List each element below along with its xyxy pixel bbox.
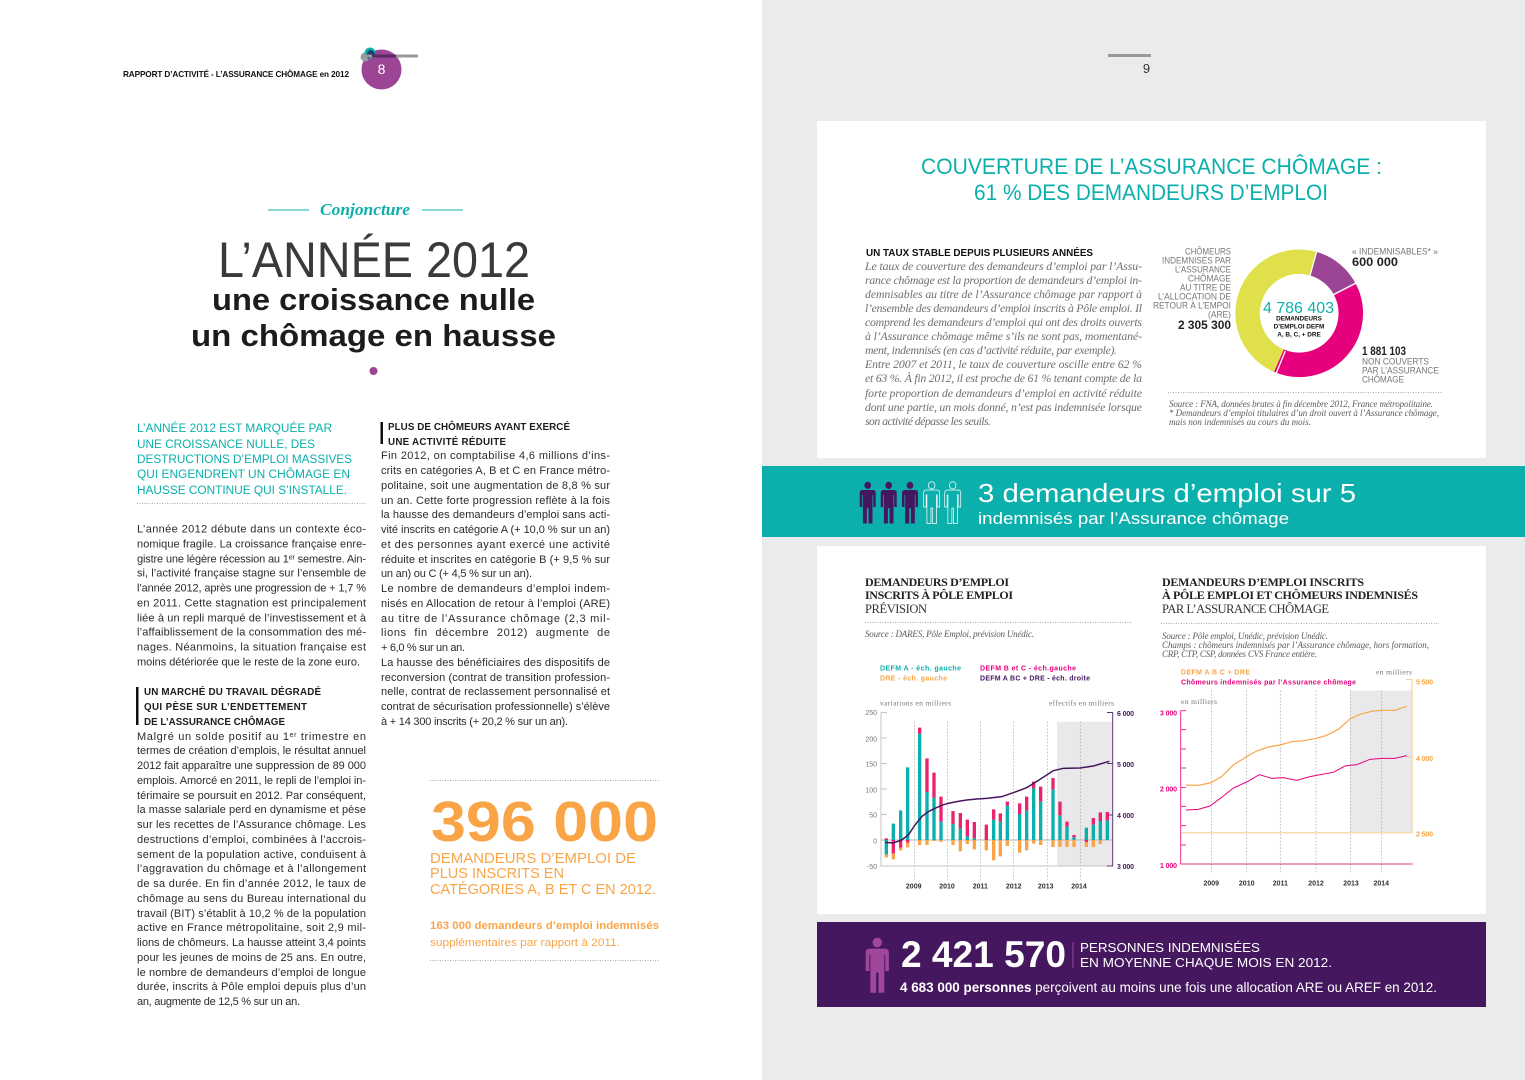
year labels: 2009 <box>1204 880 1219 888</box>
left column paragraph 2: durée, inscrits à Pôle emploi depuis plus d’un <box>137 981 366 993</box>
left axis labels: 100 <box>865 788 877 794</box>
main title: une croissance nulle <box>212 282 535 317</box>
left column paragraph 2: de sa durée. En fin d’année 2012, le taux de <box>137 878 366 890</box>
source note: * Demandeurs d’emploi titulaires d’un droit ouvert à l’Assurance chômage, <box>1169 408 1439 418</box>
callout: 396 000: PLUS INSCRITS EN <box>430 865 564 882</box>
left column paragraph 2: trimestre en <box>297 731 366 743</box>
left column paragraph 1: liée à un repli marqué de l’investissement et à <box>137 612 367 624</box>
heading: right chart: DEMANDEURS D’EMPLOI INSCRITS <box>1162 575 1364 589</box>
donut label: indemnified: L’ALLOCATION DE <box>1158 292 1231 302</box>
year labels <box>906 884 1087 890</box>
donut label: indemnified: CHÔMEURS <box>1185 246 1231 256</box>
left column paragraph 2: travail (BIT) s’établit à 10,2 % de la population <box>137 908 366 920</box>
left column paragraph 1: moins détériorée que le reste de la zone euro. <box>137 656 360 668</box>
callout: 396 000: supplémentaires par rapport à 2011. <box>430 937 620 949</box>
donut label: indemnisables: « INDEMNISABLES* » <box>1352 246 1438 256</box>
heading: left chart: INSCRITS À PÔLE EMPLOI <box>865 588 1013 602</box>
donut center label <box>1263 300 1334 338</box>
intro text: UNE CROISSANCE NULLE, DES <box>137 437 315 451</box>
left column subheading <box>136 686 321 728</box>
text block: stable rate <box>864 247 1143 428</box>
year labels <box>1204 880 1389 888</box>
purple dot ornament <box>370 367 378 375</box>
left column paragraph 2: destructions d’emploi, combinées à l’accrois- <box>137 834 366 846</box>
heading: coverage: 61 % DES DEMANDEURS D’EMPLOI <box>974 180 1328 205</box>
page number 8 badge: 8 <box>378 61 386 77</box>
right scale labels: 2 500 <box>1416 832 1433 838</box>
right scale labels: 5 500 <box>1416 680 1433 686</box>
year labels: 2013 <box>1038 884 1054 890</box>
banner: 2 421 570 <box>817 922 1486 1007</box>
text block: stable rate: ment, indemnisés (en cas d’activité réduite, par exemple). <box>865 343 1117 357</box>
year labels: 2011 <box>973 884 988 890</box>
left column paragraph 1: er <box>289 554 296 562</box>
left column paragraph 2: sement de la population active, conduisent à <box>137 849 367 861</box>
page number 8 badge <box>360 48 418 90</box>
second column body text: un an) ou C (+ 4,5 % sur un an). <box>381 568 532 580</box>
second column body text <box>381 450 610 728</box>
left scale labels <box>1160 710 1177 870</box>
text block: stable rate: Le taux de couverture des demandeurs d’emploi par l’Assu- <box>864 259 1142 273</box>
donut center label: D’EMPLOI DEFM <box>1274 324 1324 330</box>
second column body text: à + 14 300 inscrits (+ 20,2 % sur un an). <box>381 716 568 728</box>
text block: stable rate: à l’Assurance chômage même s’ils ne sont pas, momentané- <box>865 329 1142 343</box>
left scale labels: 3 000 <box>1160 710 1177 718</box>
right chart: two line series: en milliers <box>1181 697 1217 706</box>
text block: stable rate: son activité dépasse les seuils. <box>865 414 991 428</box>
second column body text: un an. Cette forte progression reflète à la fois <box>381 495 610 507</box>
second column body text: reconversion (contrat de transition profession- <box>381 672 610 684</box>
donut label: indemnified: INDEMNISÉS PAR <box>1162 256 1231 266</box>
banner text: 3 demandeurs d’emploi sur 5 <box>978 478 1356 508</box>
left column paragraph 1: gistre une légère récession au 1 <box>137 554 289 566</box>
left column paragraph 1: l’affaiblissement de la consommation des mé- <box>137 626 366 638</box>
year labels: 2014 <box>1071 884 1087 890</box>
left column paragraph 1: si, l’activité française stagne sur l’ensemble de <box>137 568 366 580</box>
source note: mais non indemnisés au cours du mois. <box>1169 417 1311 427</box>
left column paragraph 2: térimaire se poursuit en 2012. Par conséquent, <box>137 790 366 802</box>
left column paragraph 2 <box>137 731 367 1008</box>
left chart: variations bar chart with line <box>865 698 1134 890</box>
left axis labels: 250 <box>865 710 877 717</box>
left axis labels: -50 <box>867 864 877 871</box>
section label: Conjoncture: Conjoncture <box>320 200 410 219</box>
text block: stable rate: Entre 2007 et 2011, le taux de couverture oscille entre 62 % <box>864 357 1142 371</box>
donut label: not covered: 1 881 103 <box>1362 346 1406 358</box>
donut center label: DEMANDEURS <box>1276 316 1323 322</box>
page number 9: 9 <box>1143 61 1150 76</box>
donut label: indemnisables: 600 000 <box>1352 255 1398 269</box>
intro text: L’ANNÉE 2012 EST MARQUÉE PAR <box>137 420 332 435</box>
left column subheading: UN MARCHÉ DU TRAVAIL DÉGRADÉ <box>144 686 321 698</box>
left column paragraph 2: 2012 fait apparaître une suppression de 89 000 <box>137 760 366 772</box>
left column paragraph 1: semestre. Ain- <box>295 554 366 566</box>
callout: 396 000: 163 000 demandeurs d’emploi indemnisés <box>430 920 659 932</box>
icon: person <box>866 938 889 993</box>
figure caption: EN MOYENNE CHAQUE MOIS EN 2012. <box>1080 955 1332 970</box>
heading: right chart: PAR L’ASSURANCE CHÔMAGE <box>1162 602 1329 616</box>
donut center label: A, B, C, + DRE <box>1277 332 1321 338</box>
year labels: 2012 <box>1006 884 1022 890</box>
left column paragraph 2: active en France métropolitaine, soit 2,9 mil- <box>137 922 366 934</box>
right chart: two line series <box>1160 668 1433 888</box>
donut label: not covered: CHÔMAGE <box>1362 374 1404 384</box>
donut chart <box>1248 251 1356 375</box>
left chart legend: DEFM A BC + DRE - éch. droite <box>980 676 1090 682</box>
heading: right chart: À PÔLE EMPLOI ET CHÔMEURS INDEMNISÉS <box>1162 588 1418 602</box>
text block: stable rate: rance chômage est la proportion de demandeurs d’emploi in- <box>865 273 1142 287</box>
source note: Source : FNA, données brutes à fin décembre 2012, France métropolitaine. <box>1169 399 1433 409</box>
second column body text: crits en catégories A, B et C en France métro- <box>381 465 610 477</box>
text block: stable rate: comprend les demandeurs d’emploi qui ont des droits ouverts <box>865 315 1142 329</box>
donut label: indemnified: L’ASSURANCE <box>1175 264 1231 274</box>
left column paragraph 1: L’année 2012 débute dans un contexte éco- <box>137 524 366 536</box>
left column paragraph 2: le nombre de demandeurs d’emploi de longue <box>137 967 366 979</box>
left axis labels: 150 <box>865 762 877 768</box>
second column body text: contrat de sécurisation professionnelle) s’élève <box>381 701 610 713</box>
heading: left chart: Source : DARES, Pôle Emploi, prévision Unédic. <box>865 629 1034 639</box>
right page background <box>762 0 1525 1080</box>
left scale labels: 2 000 <box>1160 786 1177 794</box>
year labels: 2011 <box>1273 880 1288 888</box>
callout: 396 000: DEMANDEURS D’EMPLOI DE <box>430 850 636 867</box>
heading: right chart <box>1161 575 1439 659</box>
year labels: 2012 <box>1308 880 1324 888</box>
icon: five people <box>860 482 961 524</box>
banner text: indemnisés par l’Assurance chômage <box>978 510 1289 528</box>
donut label: indemnified: (ARE) <box>1208 310 1231 320</box>
donut label: not covered: PAR L’ASSURANCE <box>1362 366 1439 376</box>
second column body text: au titre de l’Assurance chômage (2,3 mil- <box>381 613 610 625</box>
left column paragraph 1: nages. Néanmoins, la situation française est <box>137 642 366 654</box>
left column paragraph 2: chômage au sens du Bureau international du <box>137 893 366 905</box>
heading: right chart: Champs : chômeurs indemnisés par l’Assurance chômage, hors formation, <box>1162 640 1429 650</box>
left column paragraph 2: an, augmente de 12,5 % sur un an. <box>137 996 300 1008</box>
main title: un chômage en hausse <box>191 318 556 353</box>
left axis labels: 0 <box>873 838 877 846</box>
second column body text: Le nombre de demandeurs d’emploi indem- <box>381 583 610 595</box>
left column subheading: DE L’ASSURANCE CHÔMAGE <box>144 716 285 728</box>
source note <box>1169 399 1439 427</box>
intro text <box>137 420 352 497</box>
second column body text: réduite et inscrites en catégorie B (+ 9,5 % sur <box>381 554 610 566</box>
second column body text: politaine, soit une augmentation de 8,8 % sur <box>381 480 610 492</box>
donut label: indemnified: CHÔMAGE <box>1188 274 1231 284</box>
main title <box>191 232 556 353</box>
heading: right chart: CRP, CTP, CSP, données CVS France entière. <box>1162 649 1317 659</box>
heading: left chart <box>865 575 1132 639</box>
left column paragraph 2: pour les jeunes de moins de 25 ans. En outre, <box>137 952 366 964</box>
right chart: two line series: DEFM A B C + DRE <box>1181 670 1250 676</box>
left column paragraph 2: er <box>290 732 297 739</box>
intro text: DESTRUCTIONS D’EMPLOI MASSIVES <box>137 452 352 466</box>
left chart legend: DEFM A - éch. gauche <box>880 666 961 672</box>
left axis labels: 50 <box>869 812 877 820</box>
right axis labels: 4 000 <box>1117 813 1134 820</box>
second column body text: Fin 2012, on comptabilise 4,6 millions d’ins- <box>381 450 610 462</box>
year labels: 2010 <box>1239 880 1255 888</box>
heading: right chart: Source : Pôle emploi, Unédic, prévision Unédic. <box>1162 631 1328 641</box>
second column subheading <box>380 421 570 448</box>
left scale labels: 1 000 <box>1160 863 1177 870</box>
left column paragraph 2: l’aggravation du chômage et à l’allongement <box>137 863 366 875</box>
left column paragraph 2: la masse salariale perd en dynamisme et pèse <box>137 804 366 816</box>
left column paragraph 2: emplois. Amorcé en 2011, le repli de l’emploi in- <box>137 775 366 787</box>
panel: charts <box>817 546 1486 914</box>
text block: stable rate: demnisables au titre de l’Assurance chômage par rapport à <box>865 287 1142 301</box>
panel: coverage <box>817 121 1486 458</box>
callout: 396 000: 396 000 <box>431 790 658 854</box>
second column body text: La hausse des bénéficiaires des dispositifs de <box>381 657 610 669</box>
left chart legend <box>880 666 1090 682</box>
left column paragraph 2: Malgré un solde positif au 1 <box>137 731 289 743</box>
year labels: 2009 <box>906 884 922 890</box>
banner: 3 out of 5 <box>762 466 1525 537</box>
left chart legend: DRE - éch. gauche <box>880 676 947 682</box>
donut label: indemnified: 2 305 300 <box>1178 318 1231 332</box>
text block: stable rate: l’ensemble des demandeurs d’emploi inscrits à Pôle emploi. Il <box>865 301 1143 315</box>
heading: left chart: DEMANDEURS D’EMPLOI <box>865 575 1009 589</box>
left column paragraph 2: sur les recettes de l’Assurance chômage. Les <box>137 819 366 831</box>
intro text: QUI ENGENDRENT UN CHÔMAGE EN <box>137 466 350 481</box>
second column subheading: PLUS DE CHÔMEURS AYANT EXERCÉ <box>388 421 570 433</box>
right axis labels: 3 000 <box>1117 864 1134 871</box>
heading: coverage: COUVERTURE DE L’ASSURANCE CHÔMAGE : <box>921 154 1382 179</box>
left column paragraph 1: l’année 2012, après une progression de + 1,7 % <box>137 582 366 594</box>
year labels: 2014 <box>1374 880 1389 888</box>
right scale labels <box>1416 680 1433 838</box>
donut label: not covered: NON COUVERTS <box>1362 356 1429 366</box>
left chart: variations bar chart with line: effectifs en milliers <box>1049 698 1114 708</box>
left axis labels <box>865 710 877 871</box>
second column body text: lions fin décembre 2012) augmente de <box>381 627 610 639</box>
page number 9 <box>1108 54 1151 76</box>
right axis labels: 5 000 <box>1117 762 1134 769</box>
right axis labels: 6 000 <box>1117 711 1134 718</box>
second column body text: nisés en Allocation de retour à l’emploi (ARE) <box>381 598 610 610</box>
right scale labels: 4 000 <box>1416 756 1433 763</box>
heading: left chart: PRÉVISION <box>865 602 927 616</box>
year labels: 2010 <box>939 884 955 890</box>
second column body text: la hausse des demandeurs d’emploi sans acti- <box>381 509 610 521</box>
left column paragraph 1: nomique fragile. La croissance française enre- <box>137 538 366 550</box>
donut label: indemnified: RETOUR À L’EMPOI <box>1153 300 1231 310</box>
left column paragraph 1 <box>137 524 367 668</box>
right chart: two line series: en milliers <box>1376 668 1412 676</box>
second column body text: et des personnes ayant exercé une activité <box>381 539 610 551</box>
running header: report title: RAPPORT D’ACTIVITÉ - L’ASSURANCE CHÔMAGE en 2012 <box>123 68 349 79</box>
donut label: indemnified: AU TITRE DE <box>1180 282 1231 292</box>
second column body text: + 6,0 % sur un an. <box>381 642 465 654</box>
text block: stable rate: et 63 %. À fin 2012, il est proche de 61 % tenant compte de la <box>865 371 1142 385</box>
figure caption: PERSONNES INDEMNISÉES <box>1080 940 1260 955</box>
left axis labels: 200 <box>865 736 877 744</box>
second column body text: vité inscrits en catégorie A (+ 10,0 % sur un an) <box>381 524 610 536</box>
banner text <box>978 478 1356 528</box>
donut center label: 4 786 403 <box>1263 300 1334 317</box>
callout: 396 000: CATÉGORIES A, B ET C EN 2012. <box>430 881 656 898</box>
left chart legend: DEFM B et C - éch.gauche <box>980 666 1076 672</box>
heading: coverage <box>921 154 1382 205</box>
second column body text: nelle, contrat de reclassement personnalisé et <box>381 686 610 698</box>
text block: stable rate: forte proportion de demandeurs d’emploi en activité réduite <box>865 386 1142 400</box>
callout: 396 000 <box>430 780 660 960</box>
right chart: two line series: Chômeurs indemnisés par l’Assurance chômage <box>1181 680 1356 686</box>
figure caption <box>1080 940 1332 970</box>
left chart: variations bar chart with line: variations en milliers <box>880 698 951 708</box>
text block: stable rate: UN TAUX STABLE DEPUIS PLUSIEURS ANNÉES <box>866 247 1093 259</box>
donut label: not covered <box>1362 346 1439 384</box>
left column paragraph 2: termes de création d’emplois, le résultat annuel <box>137 745 366 757</box>
main title: L’ANNÉE 2012 <box>218 232 530 288</box>
text block: stable rate: dont une partie, un mois donné, n’est pas indemnisée lorsque <box>865 400 1142 414</box>
left column paragraph 2: lions de chômeurs. La hausse atteint 3,4 points <box>137 937 366 949</box>
right axis labels <box>1117 711 1134 871</box>
key figure: 2 421 570 <box>901 934 1066 975</box>
donut label: indemnified <box>1153 246 1231 332</box>
second column subheading: UNE ACTIVITÉ RÉDUITE <box>388 436 506 448</box>
left column subheading: QUI PÈSE SUR L’ENDETTEMENT <box>144 701 307 713</box>
left column paragraph 1: en 2011. Cette stagnation est principalement <box>137 598 366 610</box>
recipients note: 4 683 000 personnes perçoivent au moins une fois une allocation ARE ou AREF en 2012. <box>900 980 1437 995</box>
year labels: 2013 <box>1343 880 1359 888</box>
intro text: HAUSSE CONTINUE QUI S’INSTALLE. <box>137 483 347 497</box>
donut label: indemnisables <box>1352 246 1438 269</box>
